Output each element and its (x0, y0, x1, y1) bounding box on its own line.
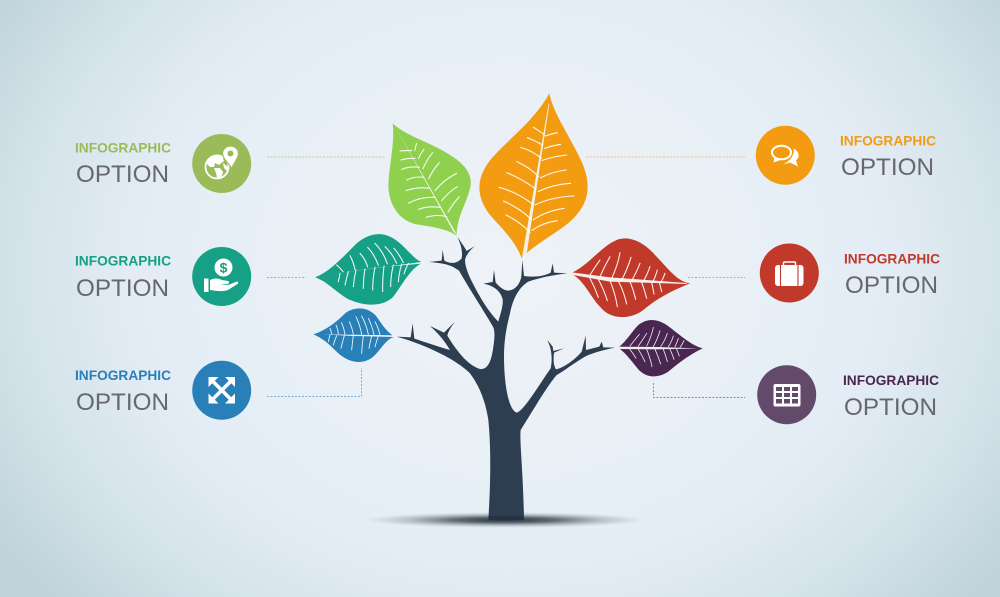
circle: red (760, 244, 819, 302)
icon: coin in hand (204, 258, 238, 292)
icon: chat bubbles (772, 146, 799, 166)
tree base shade (488, 516, 524, 520)
option: red (right middle) (760, 244, 940, 302)
leaf: purple (618, 320, 703, 376)
option: teal (left middle) (75, 247, 251, 306)
option: blue (left bottom) (75, 361, 251, 420)
heading: blue: INFOGRAPHIC (75, 367, 171, 383)
connector: teal (267, 276, 306, 278)
heading: teal: INFOGRAPHIC (75, 252, 171, 268)
leaf: orange (479, 93, 588, 258)
leaf: red (569, 238, 690, 317)
connector: purple (654, 383, 745, 398)
circle: green (192, 134, 251, 193)
leaf: green (388, 123, 471, 236)
icon: briefcase (775, 262, 804, 286)
leaf: blue (313, 308, 396, 362)
connector: green (267, 156, 386, 158)
circle: purple (757, 365, 816, 424)
tree trunk and branches (397, 237, 615, 520)
heading: green: INFOGRAPHIC (75, 140, 171, 156)
text: option: OPTION (841, 154, 934, 181)
icon: expand arrows (208, 377, 235, 404)
icon: globe and pin (206, 146, 238, 179)
connector: red (688, 276, 745, 278)
circle: teal (192, 247, 251, 306)
option: purple (right bottom) (757, 365, 939, 424)
connector: blue (267, 368, 362, 396)
option: orange (right top) (756, 126, 936, 185)
leaf: teal (315, 234, 424, 305)
icon: coin in hand: $ (220, 260, 228, 276)
circle: orange (756, 126, 815, 185)
icon: table grid (774, 384, 800, 406)
circle: blue (192, 361, 251, 420)
tree shadow (363, 512, 647, 528)
heading: red: INFOGRAPHIC (844, 250, 940, 266)
option: green (left top) (75, 134, 251, 193)
text: option: OPTION (76, 275, 169, 302)
heading: purple: INFOGRAPHIC (843, 372, 939, 388)
text: option: OPTION (76, 389, 169, 416)
heading: orange: INFOGRAPHIC (840, 132, 936, 148)
text: option: OPTION (844, 394, 937, 421)
text: option: OPTION (76, 161, 169, 188)
text: option: OPTION (845, 272, 938, 299)
connector: orange (586, 156, 745, 158)
